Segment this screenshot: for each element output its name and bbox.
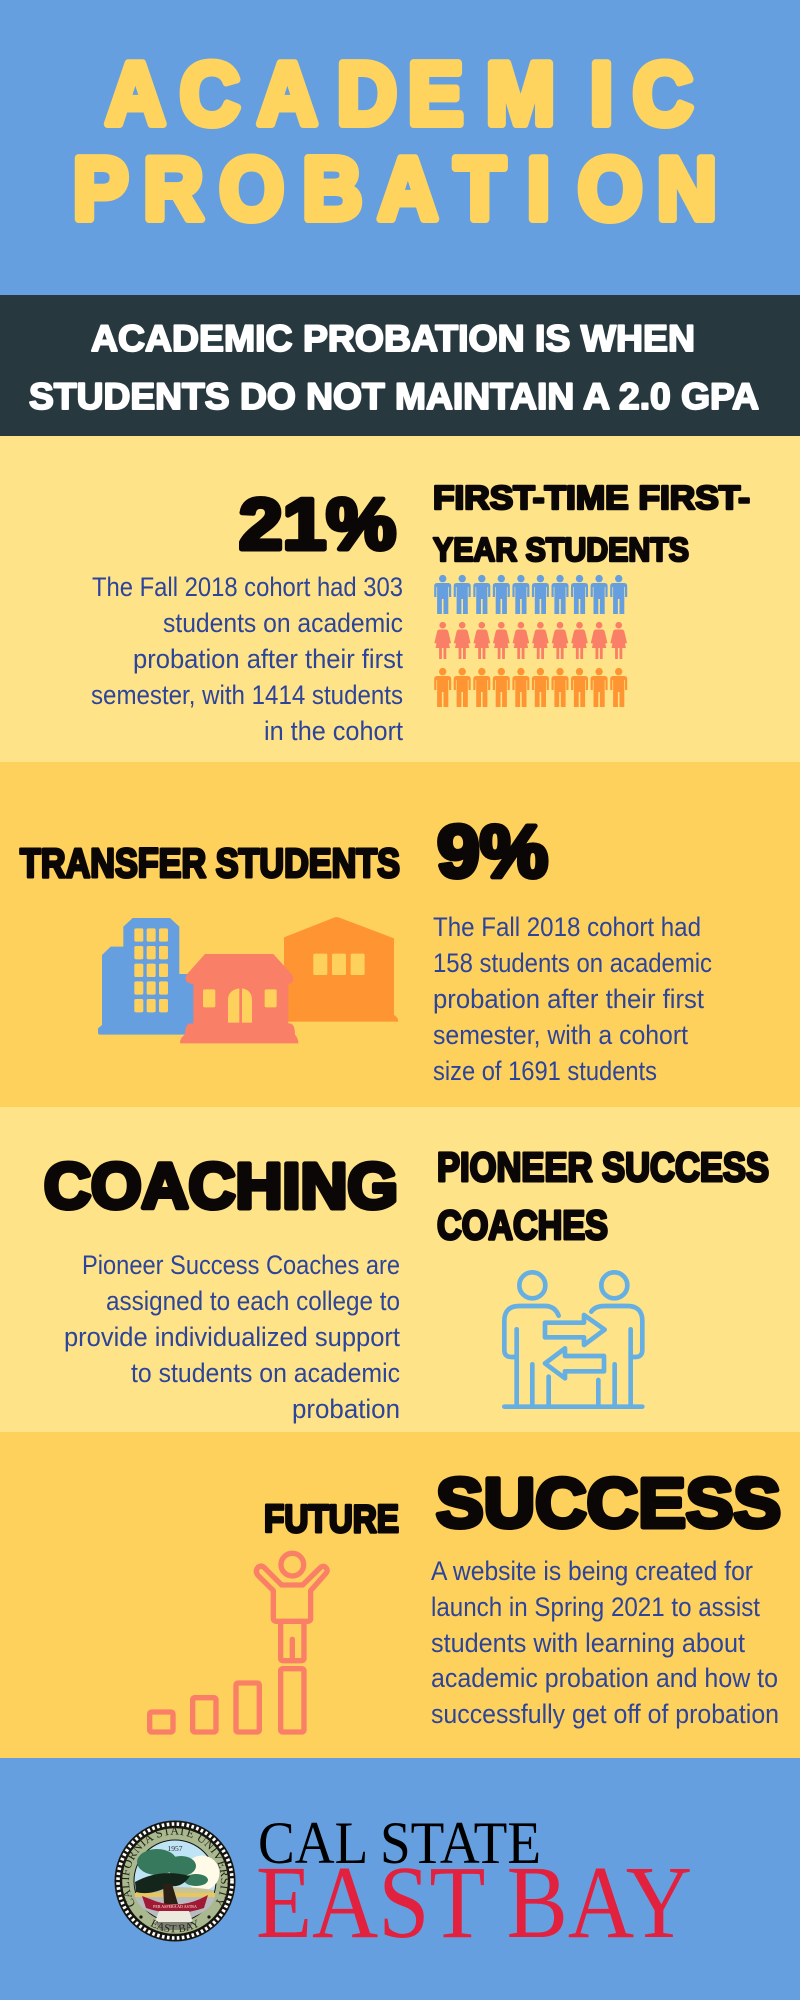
text block: transfer description: semester, with a cohort [433,1020,688,1050]
logo: Cal State wordmark: EAST BAY [256,1845,692,1960]
heading: pioneer success coaches: COACHES [437,1202,608,1248]
text block: first-year description: probation after their first [133,644,403,674]
panel: footer [114,1810,692,1960]
statistic: 21%: 21% [239,485,396,565]
panel: title banner [0,0,800,295]
pictogram: row of blue men [434,575,627,614]
title: ACADEMIC [105,46,693,144]
text block: transfer description: size of 1691 students [433,1056,657,1086]
text block: success description: academic probation and how to [431,1663,778,1693]
icon: campus buildings [98,917,398,1043]
text block: first-year description: in the cohort [264,716,403,746]
definition text [29,318,759,417]
pictogram: row of orange men [434,668,627,707]
panel: definition banner [0,295,800,436]
text block: coaching description: Pioneer Success Coaches are [82,1250,400,1280]
panel: first-time first-year students [0,436,800,762]
text block: coaching description: probation [292,1394,400,1424]
text block: first-year description [91,572,403,746]
icon: person standing on rising bars [150,1553,327,1732]
text block: transfer description: The Fall 2018 cohort had [433,912,701,942]
text block: first-year description: students on academic [163,608,403,638]
panel: transfer students [0,762,800,1107]
text block: transfer description [433,912,712,1086]
heading: first-time first-year students: FIRST-TIME FIRST- [433,479,750,516]
heading: first-time first-year students [433,479,750,568]
heading: future: FUTURE [264,1498,399,1541]
text block: coaching description [64,1250,400,1424]
text block: first-year description: semester, with 1414 students [91,680,403,710]
definition text: ACADEMIC PROBATION IS WHEN [91,318,695,359]
heading: transfer students: TRANSFER STUDENTS [20,840,400,886]
text block: success description: successfully get off of probation [431,1699,779,1729]
pictogram: row of salmon women [434,622,627,659]
text block: coaching description: assigned to each college to [106,1286,400,1316]
panel: coaching [0,1107,800,1432]
title [73,46,717,239]
logo: university seal [114,1820,236,1942]
heading: coaching: COACHING [44,1150,398,1222]
icon: coaches exchanging arrows [504,1272,642,1407]
logo: university seal: PER ASPERA AD ASTRA [153,1904,197,1909]
logo: Cal State wordmark: CAL STATE [258,1810,541,1876]
logo: university seal: CALIFORNIA STATE UNIVERSITY [122,1826,229,1908]
text block: success description: students with learning about [431,1628,745,1658]
panel: future success [0,1432,800,1758]
text block: success description: launch in Spring 2021 to assist [431,1592,760,1622]
text block: success description [431,1556,779,1729]
logo: university seal: 1957 [168,1844,183,1853]
text block: first-year description: The Fall 2018 cohort had 303 [92,572,403,602]
text block: transfer description: probation after their first [433,984,704,1014]
text block: coaching description: provide individualized support [64,1322,400,1352]
statistic: 9%: 9% [437,810,548,893]
heading: pioneer success coaches [437,1144,769,1248]
heading: success: SUCCESS [436,1464,781,1542]
logo: Cal State wordmark [256,1810,692,1960]
definition text: STUDENTS DO NOT MAINTAIN A 2.0 GPA [29,376,759,417]
title: PROBATION [73,141,717,239]
heading: first-time first-year students: YEAR STUDENTS [433,531,689,568]
text block: transfer description: 158 students on academic [433,948,712,978]
logo: university seal: EAST BAY [150,1919,198,1932]
text block: success description: A website is being created for [431,1556,753,1586]
text block: coaching description: to students on academic [131,1358,400,1388]
